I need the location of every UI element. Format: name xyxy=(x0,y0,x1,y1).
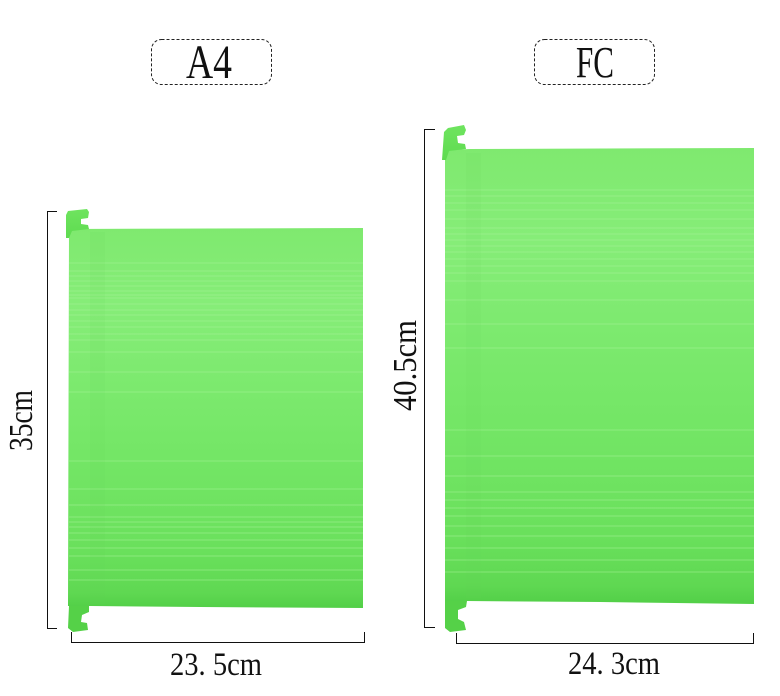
A4 height dimension xyxy=(3,212,57,628)
label box: FC: FC xyxy=(576,38,614,87)
label box: A4: A4 xyxy=(186,36,232,89)
label box: FC xyxy=(534,38,654,87)
FC top hanger clip xyxy=(442,125,466,160)
A4 sheet body xyxy=(68,228,363,608)
FC width dimension xyxy=(456,633,754,682)
FC height dimension: 40.5cm xyxy=(387,320,424,411)
A4 top hanger clip xyxy=(66,209,89,238)
FC height dimension xyxy=(387,130,435,628)
FC hanging file folder xyxy=(442,125,754,632)
FC sheet body xyxy=(445,148,754,604)
FC bottom hanger clip xyxy=(445,601,467,632)
A4 hanging file folder xyxy=(66,209,363,632)
FC width dimension: 24. 3cm xyxy=(568,646,660,682)
A4 bottom hanger clip xyxy=(68,606,89,632)
label box: A4 xyxy=(152,36,272,89)
A4 width dimension xyxy=(72,632,364,683)
A4 width dimension: 23. 5cm xyxy=(170,647,262,683)
A4 height dimension: 35cm xyxy=(3,390,40,451)
